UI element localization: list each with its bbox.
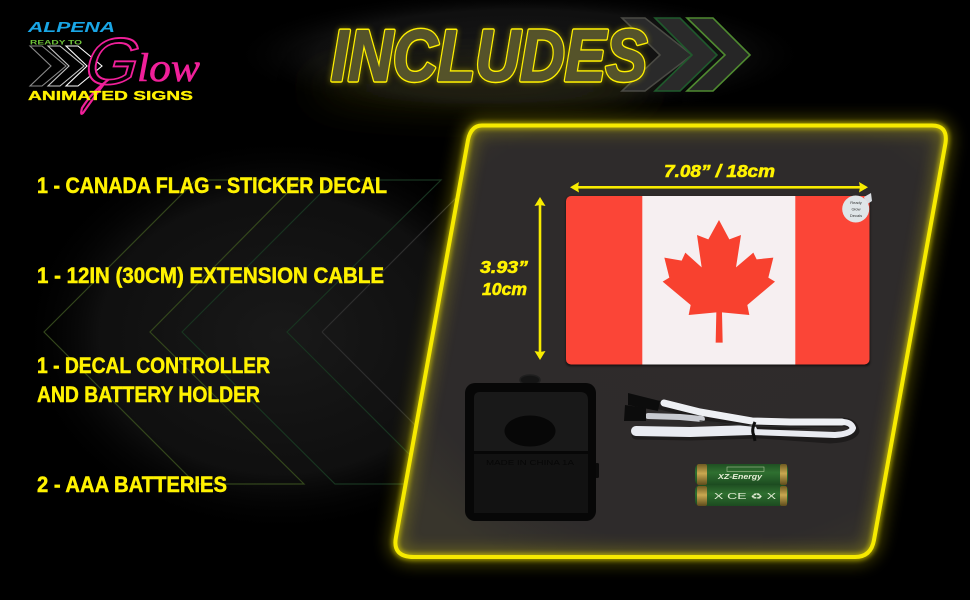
controller and battery holder [465, 375, 599, 521]
extension cable [624, 393, 855, 441]
controller: embossed text: MADE IN CHINA 1A [486, 460, 574, 467]
aaa batteries: XZ-Energy [717, 472, 763, 481]
controller: upper panel [474, 392, 588, 451]
title: includes: INCLUDES [331, 16, 647, 96]
title: includes: INCLUDES [331, 16, 647, 96]
logo: animated signs: ANIMATED SIGNS [28, 89, 193, 103]
cable: connectors [628, 393, 660, 411]
height arrow [534, 197, 546, 360]
flag: round sticker: Ready [850, 200, 862, 205]
controller: lower panel [474, 454, 588, 513]
title chevrons [622, 18, 750, 91]
flag: white band [642, 196, 795, 364]
flag: round sticker: Decals [850, 213, 862, 218]
item: decal controller [37, 353, 270, 407]
items list [37, 173, 387, 497]
flag: round sticker [842, 193, 872, 222]
logo: ready to: READY TO [30, 40, 82, 46]
title: includes: INCLUDES [331, 16, 647, 96]
logo: Alpena wordmark: ALPENA [27, 20, 115, 36]
canada flag decal [566, 193, 872, 366]
item: flag decal: 1 - CANADA FLAG - STICKER DECAL [37, 173, 387, 198]
height label: 3.93” [480, 257, 528, 277]
flag: maple leaf [663, 220, 775, 343]
width label: 7.08” / 18cm [664, 161, 775, 181]
battery: bottom [695, 485, 788, 506]
panel [395, 126, 946, 557]
logo: glow script [76, 25, 200, 114]
height label: 10cm [482, 279, 527, 299]
controller: oval window [504, 416, 556, 446]
logo [27, 20, 200, 114]
cable: ribbon [636, 403, 855, 439]
item: decal controller: 1 - DECAL CONTROLLER [37, 353, 270, 378]
item: extension cable: 1 - 12IN (30CM) EXTENSION CABLE [37, 263, 384, 288]
logo: glow script: low [137, 45, 200, 90]
aaa batteries: X CE ♻ X [714, 492, 777, 501]
height label [480, 257, 528, 299]
cable: tie [753, 422, 755, 441]
logo: glow script: G [76, 25, 151, 99]
aaa batteries [695, 464, 788, 506]
item: decal controller: AND BATTERY HOLDER [37, 382, 260, 407]
background chevrons [44, 180, 474, 484]
battery: top [695, 464, 788, 485]
flag: round sticker: Glow [851, 206, 861, 212]
item: batteries: 2 - AAA BATTERIES [37, 472, 227, 497]
logo: white chevrons [30, 46, 102, 86]
width arrow [570, 182, 868, 192]
panel glow outer [395, 126, 946, 557]
